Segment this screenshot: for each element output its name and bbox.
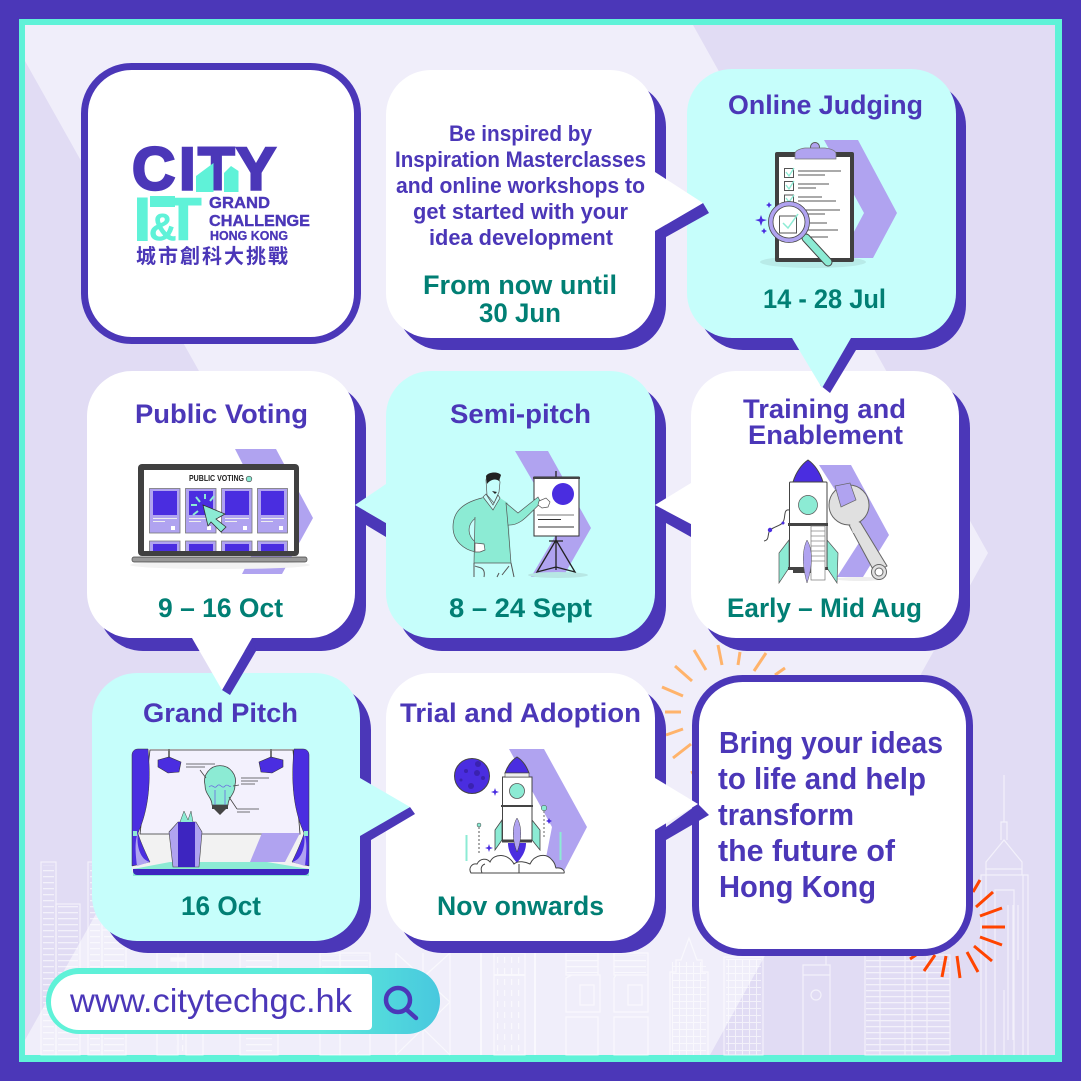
heading: Semi-pitch	[450, 399, 591, 429]
orange sunburst	[662, 645, 785, 773]
search bar: website: www.citytechgc.hk	[69, 982, 353, 1019]
card: training and enablement	[655, 371, 970, 651]
date: Early – Mid Aug	[727, 593, 922, 623]
date: 30 Jun	[479, 298, 561, 328]
heading: Online Judging	[728, 90, 923, 120]
logo: City I&T Grand Challenge: CHALLENGE	[209, 213, 310, 230]
illustration: presenter and flip chart	[453, 451, 591, 578]
heading: Training and	[743, 394, 906, 424]
illustration: clipboard and magnifier	[755, 140, 897, 268]
date: Nov onwards	[437, 891, 604, 921]
icon: magnifier	[386, 988, 416, 1018]
card: trial and adoption	[386, 673, 709, 953]
description text: Inspiration Masterclasses	[395, 147, 646, 172]
date: 9 – 16 Oct	[158, 593, 283, 623]
logo: City I&T Grand Challenge: HONG KONG	[210, 229, 288, 243]
description text: get started with your	[413, 199, 628, 224]
call to action text: transform	[718, 797, 854, 832]
date: 8 – 24 Sept	[449, 593, 592, 623]
heading: Trial and Adoption	[400, 698, 641, 728]
date: 16 Oct	[181, 891, 261, 921]
date: From now until	[423, 270, 617, 300]
call to action text	[718, 725, 943, 904]
card: public voting	[87, 371, 366, 695]
logo: City I&T Grand Challenge: T	[165, 186, 202, 253]
date: 14 - 28 Jul	[763, 284, 886, 314]
card: call to action	[696, 678, 970, 952]
icon: launching rocket	[454, 749, 587, 873]
heading: Public Voting	[135, 399, 308, 429]
card: inspiration masterclasses	[386, 70, 709, 350]
logo: City I&T Grand Challenge: I	[134, 186, 151, 253]
logo: City I&T Grand Challenge: GRAND	[209, 195, 270, 212]
card: online judging	[687, 69, 966, 393]
logo: City I&T Grand Challenge: CITY	[132, 136, 276, 202]
card: grand pitch	[92, 673, 415, 953]
description text: idea development	[429, 225, 614, 250]
date	[423, 270, 617, 328]
heading	[743, 394, 906, 450]
card: semi-pitch	[355, 371, 666, 651]
red sunburst	[910, 880, 1005, 978]
illustration: laptop with voting page: PUBLIC VOTING	[189, 473, 244, 483]
call to action text: Hong Kong	[719, 869, 876, 904]
illustration: rocket and spanner	[764, 460, 889, 583]
description text: Be inspired by	[449, 121, 593, 146]
description text: and online workshops to	[396, 173, 645, 198]
heading: Enablement	[748, 420, 903, 450]
skyline	[41, 775, 1028, 1055]
logo: City I&T Grand Challenge: 城市創科大挑戰	[136, 244, 288, 268]
card: logo	[84, 66, 358, 340]
illustration: stage with light bulb	[132, 749, 309, 876]
call to action text: the future of	[718, 833, 896, 868]
illustration: laptop with voting page	[130, 449, 313, 574]
call to action text: to life and help	[718, 761, 926, 796]
description text	[395, 121, 646, 250]
logo: City I&T Grand Challenge: &	[149, 207, 176, 249]
logo: City I&T Grand Challenge	[132, 136, 310, 268]
heading: Grand Pitch	[143, 698, 298, 728]
call to action text: Bring your ideas	[719, 725, 943, 760]
search bar: website	[46, 968, 440, 1034]
